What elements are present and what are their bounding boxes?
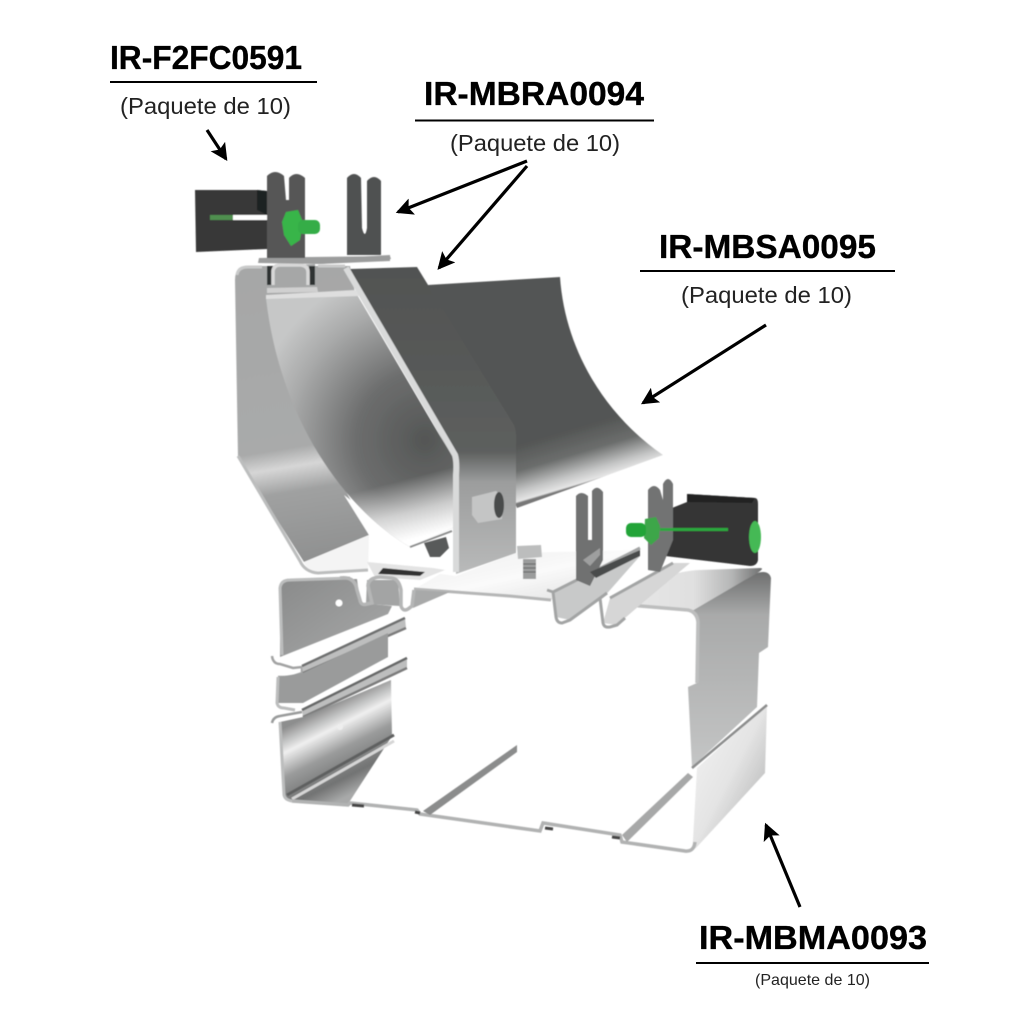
lower box section [272, 568, 771, 851]
top channel assembly [237, 256, 391, 299]
arrow: to rear fork [398, 161, 527, 212]
fixing clip lower right [626, 479, 761, 572]
green nut [282, 210, 303, 246]
green threaded rod [660, 528, 728, 531]
back dark sheet [428, 277, 663, 508]
arrow: to box section [766, 825, 800, 907]
left face rail 1 [272, 618, 406, 677]
front dark flange [350, 267, 516, 574]
label: IR-F2FC0591 [110, 39, 317, 119]
bolt on base plate [517, 545, 542, 579]
left face lower panel [280, 680, 392, 804]
fork [648, 479, 673, 572]
bottom rail right [622, 773, 693, 842]
white wedge [344, 495, 410, 546]
left channel strip [340, 562, 450, 610]
top surface of box [610, 568, 762, 611]
green cap [749, 521, 761, 553]
label: IR-MBSA0095 [640, 228, 895, 308]
hole dots [336, 600, 342, 606]
product illustration: cable tray support [195, 172, 771, 851]
right face lower panel [693, 705, 767, 849]
bottom profile [292, 801, 695, 851]
label: IR-MBMA0093: (Paquete de 10) [755, 972, 870, 989]
left face rail 2 [272, 658, 407, 723]
label: IR-MBMA0093: IR-MBMA0093 [699, 919, 927, 956]
label: IR-MBRA0094: IR-MBRA0094 [424, 75, 645, 112]
housing slot [233, 215, 267, 220]
lower left rail [287, 735, 394, 795]
light edge band [346, 268, 456, 572]
arrow: to top-left clip [207, 130, 226, 159]
label: IR-MBRA0094 [415, 75, 654, 156]
green thread [626, 523, 646, 537]
fixing clip top left [195, 172, 320, 258]
lower bracket foot [304, 535, 369, 572]
label: IR-F2FC0591: (Paquete de 10) [120, 93, 291, 119]
right face upper [688, 572, 771, 767]
label: IR-MBSA0095: (Paquete de 10) [681, 282, 852, 308]
rear fork clip right [576, 488, 640, 586]
black housing [195, 190, 267, 252]
arrow: to bracket [439, 166, 527, 268]
base plate [413, 550, 640, 600]
label: IR-MBMA0093 [696, 919, 929, 989]
green thread [298, 220, 320, 234]
bottom rail left [423, 745, 517, 815]
hex bolt on bracket [472, 491, 504, 523]
black housing [665, 494, 758, 566]
left outer silver panel [235, 266, 369, 562]
arrow: to curved sheet [643, 325, 766, 403]
inner surface highlight [266, 293, 459, 547]
label: IR-F2FC0591: IR-F2FC0591 [110, 39, 302, 76]
label: IR-MBSA0095: IR-MBSA0095 [659, 228, 876, 265]
left face upper [280, 579, 392, 657]
left face middle panel [277, 633, 388, 703]
rear fork clip top [320, 174, 390, 264]
under-plate nut [424, 537, 449, 557]
right channel profiles [547, 548, 690, 627]
green nut [644, 517, 660, 545]
inner curved surface [266, 293, 459, 547]
fork [267, 172, 305, 258]
label: IR-MBRA0094: (Paquete de 10) [450, 130, 620, 156]
